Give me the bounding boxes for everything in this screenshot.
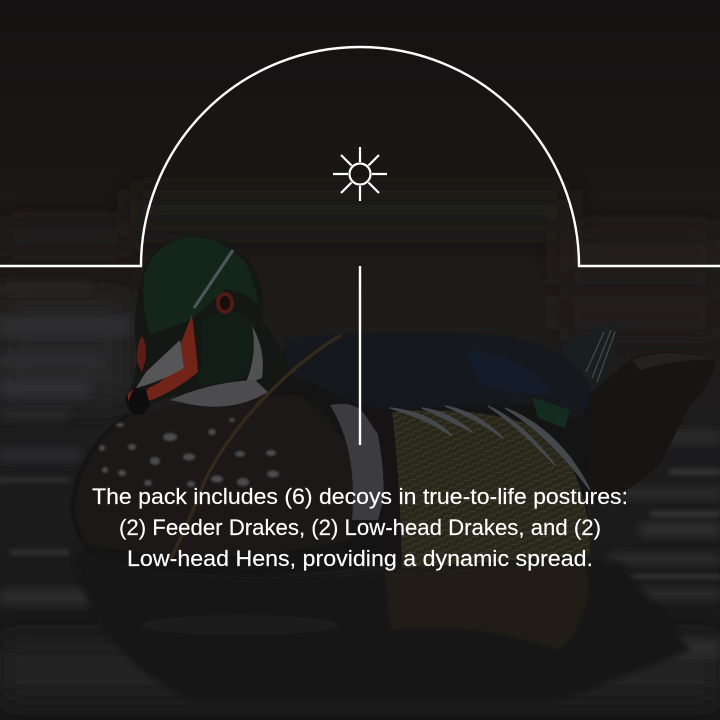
flank with ripple pattern: [390, 406, 590, 568]
caption text: The pack includes (6) decoys in true-to-life postures:: [92, 484, 628, 509]
breast: [75, 395, 355, 556]
eye: [216, 292, 234, 314]
breast speckles: [99, 418, 279, 487]
back wing: [282, 332, 590, 420]
caption text: (2) Feeder Drakes, (2) Low-head Drakes, and (2): [119, 515, 601, 540]
white flank bar: [330, 404, 386, 520]
arch line with horizon: [0, 47, 720, 266]
vertical divider line: [359, 266, 361, 445]
dark band beside the flank: [372, 410, 402, 560]
tail: [560, 322, 716, 505]
body: [70, 332, 592, 575]
caption text: [92, 484, 628, 571]
icon: sun: [333, 147, 387, 201]
wood duck decoy: [70, 236, 716, 575]
twig: [170, 335, 341, 560]
duck reflection in the water: [72, 550, 690, 700]
red bill markings: [142, 315, 198, 403]
caption text: Low-head Hens, providing a dynamic spread.: [127, 546, 593, 571]
white neck markings: [245, 326, 263, 385]
head: [125, 236, 288, 415]
